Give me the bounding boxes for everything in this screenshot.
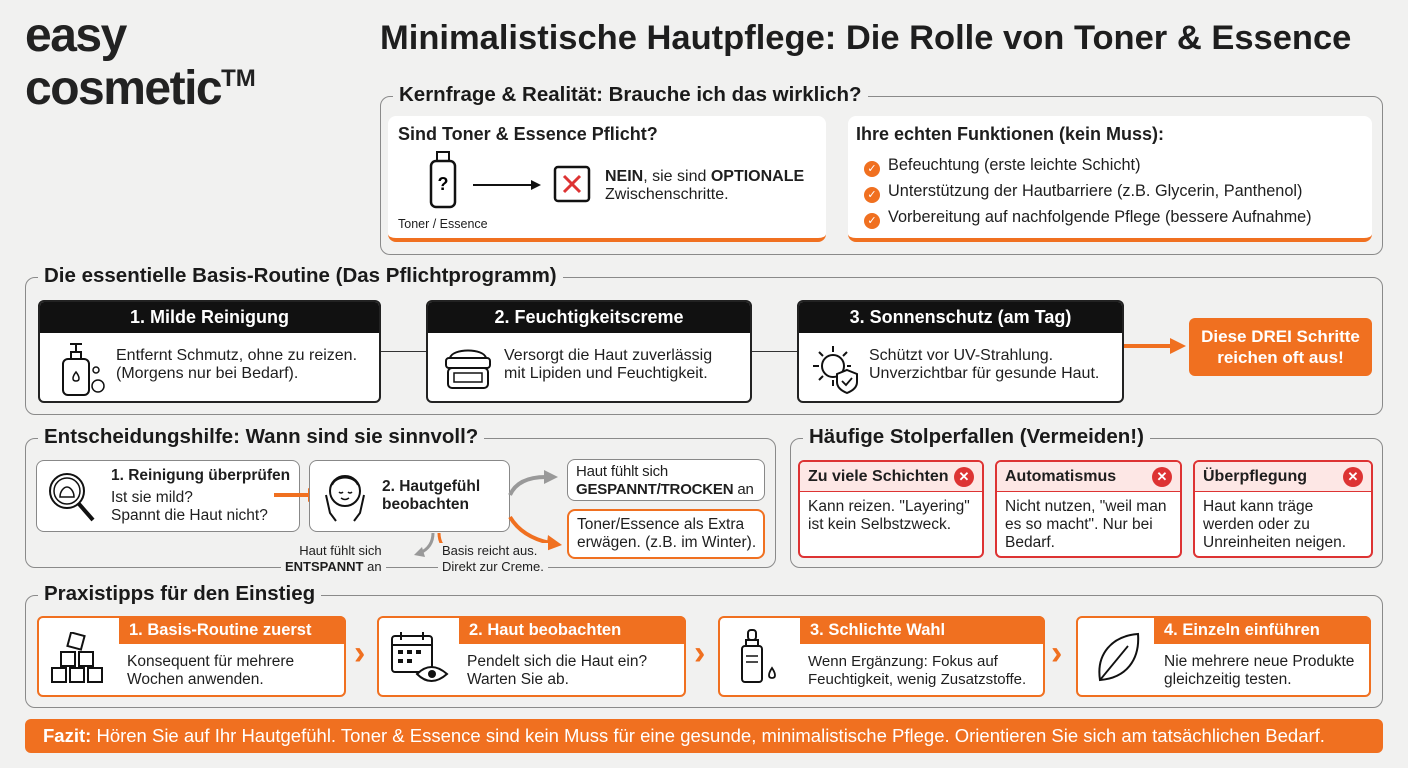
card: Pflicht: Sind Toner & Essence Pflicht? [398, 124, 658, 144]
icon: bottle [430, 151, 456, 208]
pitfall 2: ✕ [1157, 469, 1167, 484]
heading: Entscheidungshilfe: Wann sind sie sinnvoll? [44, 425, 478, 448]
card 2: Versorgt die Haut zuverlässig [504, 347, 712, 364]
tip 3: 3. Schlichte Wahl [810, 621, 945, 639]
pitfall 1: ✕ [959, 469, 969, 484]
step 1: Spannt die Haut nicht? [111, 507, 268, 524]
chevron: › [1051, 634, 1062, 672]
icon: blocks [51, 632, 103, 683]
tip 1: Konsequent für mehrere [127, 653, 294, 670]
card: Pflicht: Zwischenschritte. [605, 186, 729, 203]
callout: Diese DREI Schritte [1201, 327, 1360, 346]
outcome gray: Haut fühlt sich [576, 463, 668, 480]
pitfall 2: es so macht". Nur bei [1005, 516, 1153, 533]
card: Funktionen: Ihre echten Funktionen (kein Muss): [856, 124, 1164, 144]
pitfall 1: Zu viele Schichten [808, 468, 948, 485]
panel: Basis-Routine [25, 277, 1383, 415]
tip 2: Warten Sie ab. [467, 671, 569, 688]
heading: Die essentielle Basis-Routine (Das Pflichtprogramm) [44, 264, 557, 287]
label basis [438, 543, 548, 575]
step 2: 2. Hautgefühl [382, 478, 480, 495]
pitfall 3: werden oder zu [1203, 516, 1310, 533]
card 1 [38, 300, 381, 403]
card 1: Entfernt Schmutz, ohne zu reizen. [116, 347, 357, 364]
tip 1 [37, 616, 346, 697]
step 2: beobachten [382, 496, 469, 513]
tip 4: 4. Einzeln einführen [1164, 621, 1320, 639]
card 2 [426, 300, 752, 403]
logo: easy [25, 9, 126, 62]
pitfall 2: Nicht nutzen, "weil man [1005, 498, 1166, 515]
pitfall 1: ist kein Selbstzweck. [808, 516, 951, 533]
arrow [473, 180, 541, 190]
icon: leaf [1098, 632, 1140, 682]
pitfall 1: Kann reizen. "Layering" [808, 498, 970, 515]
card: Funktionen: ✓ [867, 163, 877, 175]
callout: reichen oft aus! [1217, 348, 1344, 367]
fazit bar: Fazit: Hören Sie auf Ihr Hautgefühl. Toner & Essence sind kein Muss für eine gesunde, minimalistische Pflege. Orientieren Sie sich am tatsächlichen Bedarf. [43, 725, 1325, 746]
icon: pump bottle [62, 343, 105, 396]
card 2: mit Lipiden und Feuchtigkeit. [504, 365, 708, 382]
chevron: › [354, 634, 365, 672]
fazit bar [25, 719, 1383, 753]
label basis: Direkt zur Creme. [442, 559, 544, 574]
card 3: Unverzichtbar für gesunde Haut. [869, 365, 1099, 382]
panel: Stolperfallen [790, 438, 1383, 568]
arrows from step 2 [414, 470, 562, 557]
card: Funktionen: Befeuchtung (erste leichte Schicht) [888, 156, 1140, 174]
tip 4: gleichzeitig testen. [1164, 671, 1292, 688]
card: Funktionen [848, 116, 1372, 242]
outcome gray: GESPANNT/TROCKEN an [576, 481, 754, 498]
card 3: 3. Sonnenschutz (am Tag) [850, 307, 1071, 327]
heading: Praxistipps für den Einstieg [44, 582, 315, 605]
pitfall 2: Bedarf. [1005, 534, 1055, 551]
panel: Kernfrage [380, 96, 1383, 255]
heading: Kernfrage: Kernfrage & Realität: Brauche ich das wirklich? [399, 83, 862, 106]
icon: dropper [741, 629, 776, 683]
pitfall 3: Unreinheiten neigen. [1203, 534, 1346, 551]
outcome orange [567, 509, 765, 559]
step 2 [309, 460, 510, 532]
pitfall 3: ✕ [1348, 469, 1358, 484]
step 1: Ist sie mild? [111, 489, 193, 506]
label basis: Basis reicht aus. [442, 543, 537, 558]
tip 1: 1. Basis-Routine zuerst [129, 621, 311, 639]
card 3: Schützt vor UV-Strahlung. [869, 347, 1053, 364]
tip 1: Wochen anwenden. [127, 671, 264, 688]
label entspannt: ENTSPANNT an [285, 559, 382, 574]
card: Pflicht: NEIN, sie sind OPTIONALE [605, 168, 804, 185]
callout [1189, 318, 1372, 376]
icon: sun shield [813, 346, 858, 394]
icon: calendar eye [391, 632, 448, 682]
card: Funktionen: Vorbereitung auf nachfolgende Pflege (bessere Aufnahme) [888, 208, 1312, 226]
tip 2: 2. Haut beobachten [469, 621, 621, 639]
pitfall 3 [1193, 460, 1373, 558]
icon: magnifier [49, 473, 94, 522]
card: Funktionen: ✓ [867, 215, 877, 227]
tip 4 [1076, 616, 1371, 697]
outcome gray [567, 459, 765, 501]
pitfall 3: Haut kann träge [1203, 498, 1313, 515]
logo: cosmeticTM [25, 62, 256, 115]
icon: red x box [554, 166, 590, 202]
pitfall 2 [995, 460, 1182, 558]
arrow: orange [1124, 338, 1186, 354]
card: Pflicht: Toner / Essence [398, 217, 488, 231]
label entspannt [281, 543, 386, 575]
card: Pflicht [388, 116, 826, 242]
arrow [274, 488, 309, 502]
pitfall 3: Überpflegung [1203, 468, 1307, 485]
outcome orange: Toner/Essence als Extra [577, 516, 744, 533]
tip 3: Wenn Ergänzung: Fokus auf [808, 653, 998, 670]
tip 3 [718, 616, 1045, 697]
step 1 [36, 460, 300, 532]
icon: bottle: ? [438, 174, 448, 194]
tip 4: Nie mehrere neue Produkte [1164, 653, 1354, 670]
tip 2: Pendelt sich die Haut ein? [467, 653, 647, 670]
icon: jar [445, 350, 491, 389]
step 1: 1. Reinigung überprüfen [111, 467, 290, 484]
pitfall 1 [798, 460, 984, 558]
card 2: 2. Feuchtigkeitscreme [494, 307, 684, 327]
panel: Entscheidungshilfe [25, 438, 776, 568]
card: Funktionen: Unterstützung der Hautbarriere (z.B. Glycerin, Panthenol) [888, 182, 1302, 200]
card: Funktionen: ✓ [867, 189, 877, 201]
title: Minimalistische Hautpflege: Die Rolle von Toner & Essence [380, 19, 1351, 57]
label entspannt: Haut fühlt sich [299, 543, 382, 558]
card 1: (Morgens nur bei Bedarf). [116, 365, 298, 382]
outcome orange: erwägen. (z.B. im Winter). [577, 534, 756, 551]
card 3 [797, 300, 1124, 403]
tip 3: Feuchtigkeit, wenig Zusatzstoffe. [808, 671, 1026, 688]
pitfall 2: Automatismus [1005, 468, 1116, 485]
heading: Häufige Stolperfallen (Vermeiden!) [809, 425, 1144, 448]
tip 2 [377, 616, 686, 697]
logo [25, 9, 256, 115]
icon: face [325, 475, 365, 522]
chevron: › [694, 634, 705, 672]
panel: Praxistipps [25, 595, 1383, 708]
card 1: 1. Milde Reinigung [130, 307, 289, 327]
